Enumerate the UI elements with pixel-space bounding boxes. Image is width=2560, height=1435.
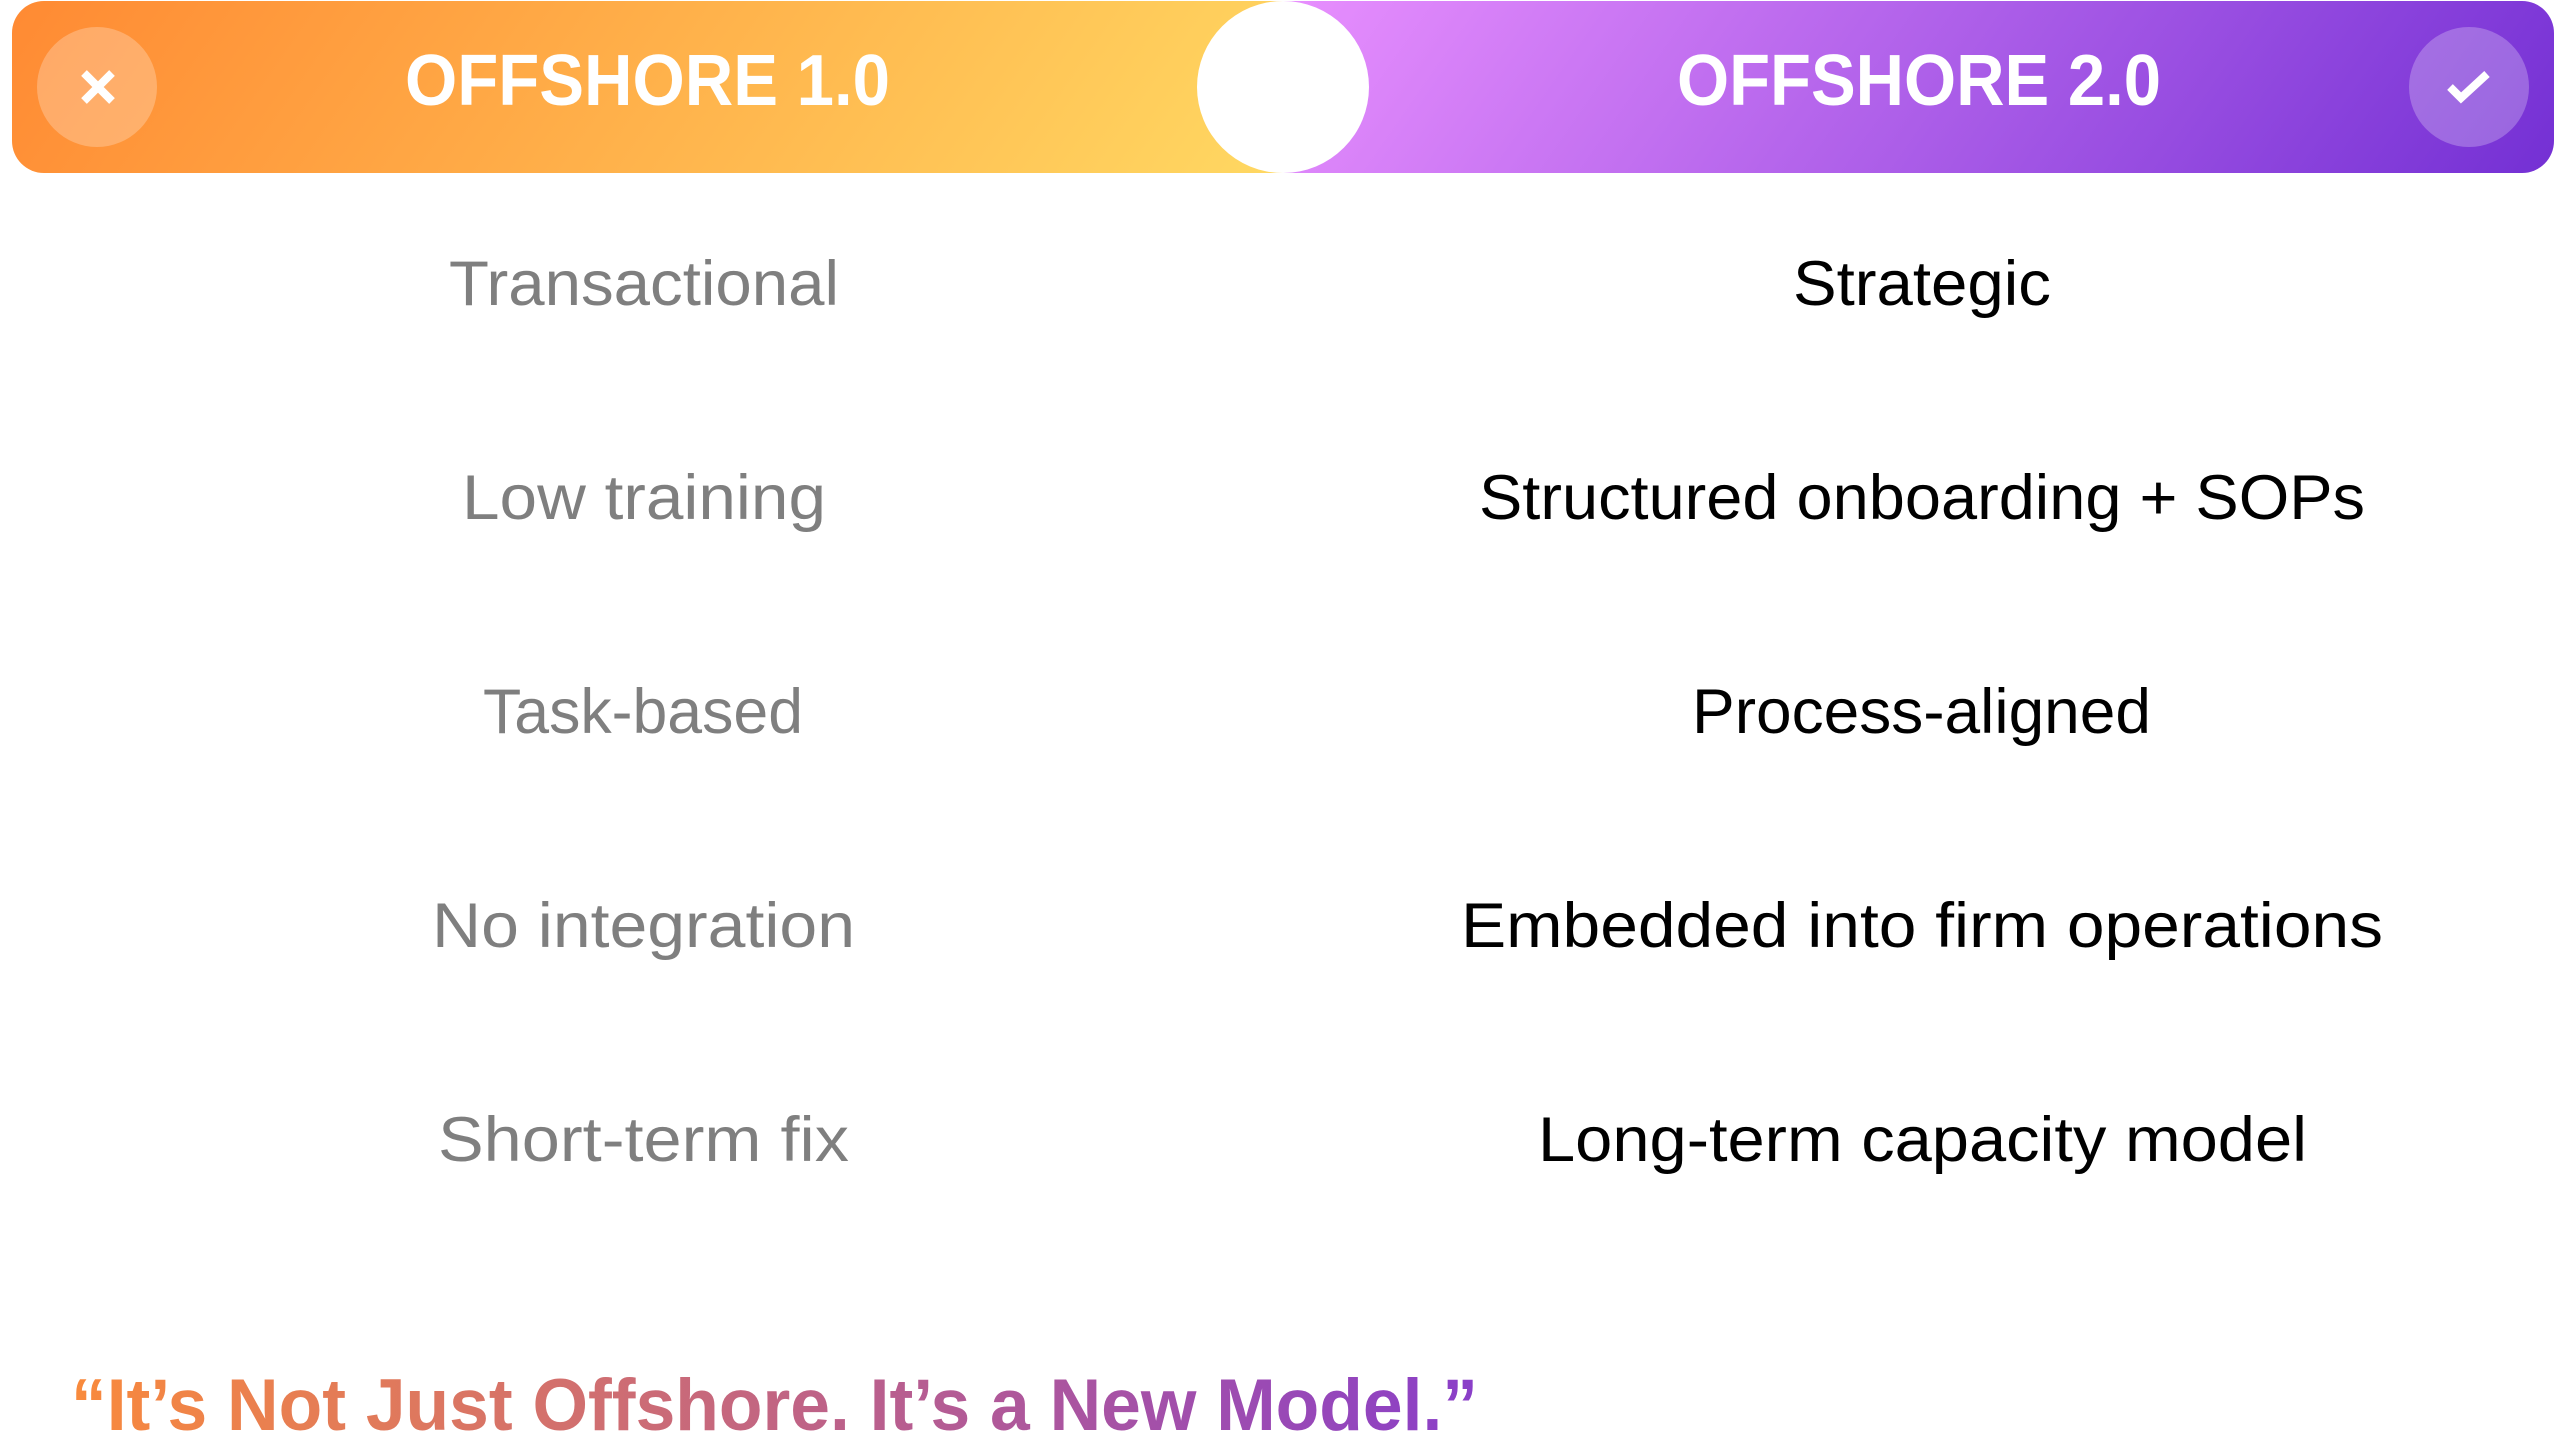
text: no integration: No integration [432,891,855,961]
text: long-term capacity model: Long-term capacity model [1538,1105,2307,1175]
text: low training: Low training [462,463,826,533]
header panel: offshore 2.0 [1283,1,2554,173]
text: strategic: Strategic [1793,249,2051,319]
text: process-aligned: Process-aligned [1692,677,2151,747]
text: task-based: Task-based [483,677,803,747]
column: offshore 2.0 traits [1461,249,2383,1175]
heading: offshore 2.0: OFFSHORE 2.0 [1677,41,2161,121]
column: offshore 1.0 traits [432,249,855,1175]
icon: check badge [2409,27,2529,147]
center circle [1197,1,1369,173]
text: short-term fix: Short-term fix [438,1105,849,1175]
heading: offshore 1.0: OFFSHORE 1.0 [405,41,890,121]
icon: cross badge [37,27,157,147]
text: embedded into firm operations: Embedded into firm operations [1461,891,2383,961]
text: structured onboarding + sops: Structured onboarding + SOPs [1479,463,2365,533]
text: transactional: Transactional [449,249,839,319]
header panel: offshore 1.0 [12,1,1283,173]
header bar [12,1,2554,173]
